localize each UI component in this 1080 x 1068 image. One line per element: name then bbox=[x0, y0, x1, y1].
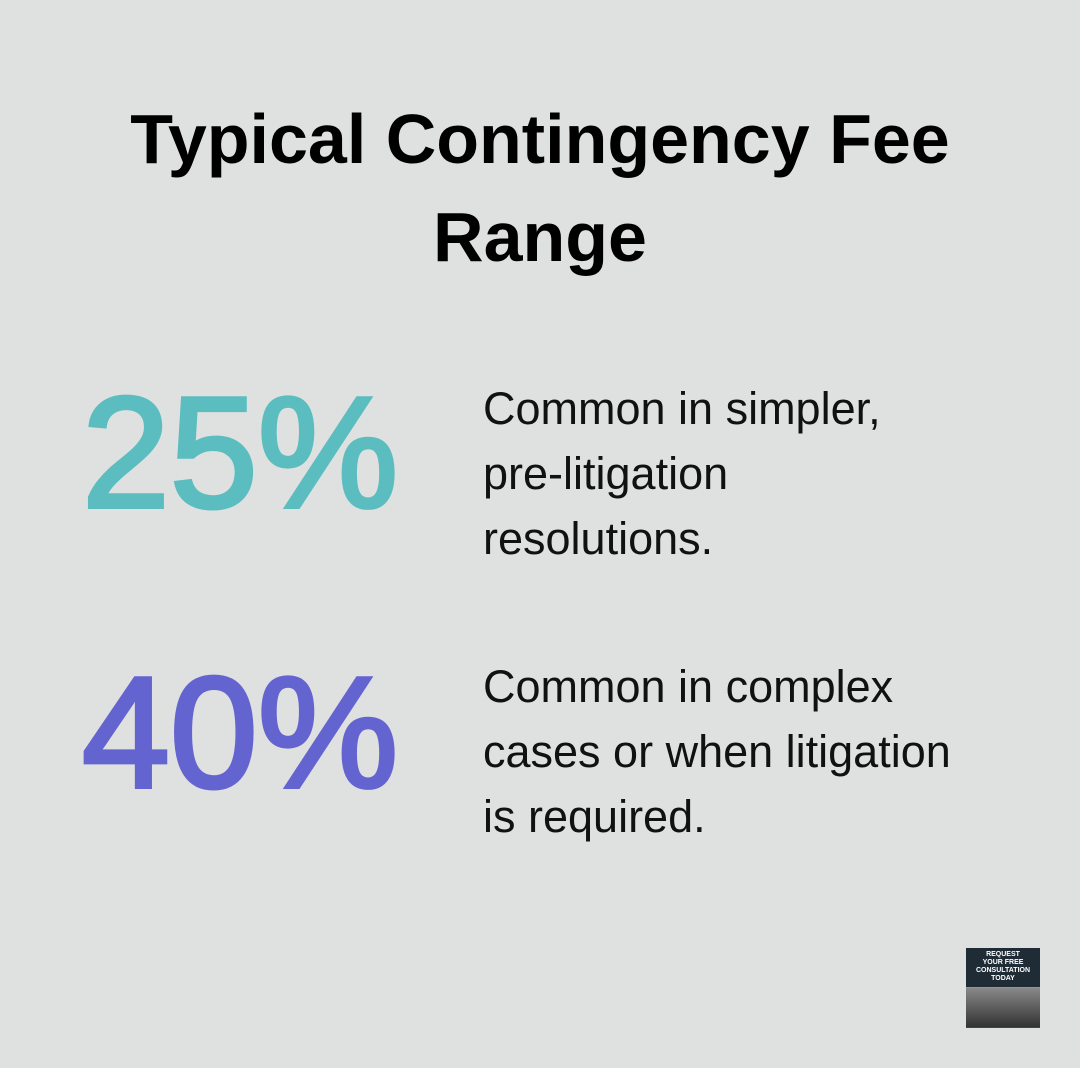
stat: 40%: 40% bbox=[82, 645, 398, 821]
stat: 25%: 25% bbox=[82, 365, 398, 541]
text: 40% description: is required. bbox=[483, 791, 706, 842]
title bbox=[130, 100, 950, 276]
text: 25% description: pre-litigation bbox=[483, 448, 728, 499]
text: 40% description bbox=[483, 661, 951, 842]
logo: consultation badge: YOUR FREE bbox=[983, 959, 1023, 966]
logo: consultation badge: CONSULTATION bbox=[976, 967, 1030, 974]
text: 40% description: cases or when litigation bbox=[483, 726, 951, 777]
logo: consultation badge: TODAY bbox=[991, 975, 1015, 982]
text: 25% description bbox=[483, 383, 881, 564]
text: 40% description: Common in complex bbox=[483, 661, 893, 712]
logo: consultation badge: REQUEST bbox=[986, 951, 1020, 958]
logo: consultation badge bbox=[966, 948, 1040, 1028]
text: 25% description: Common in simpler, bbox=[483, 383, 881, 434]
title: Range bbox=[433, 198, 647, 276]
text: 25% description: resolutions. bbox=[483, 513, 713, 564]
title: Typical Contingency Fee bbox=[130, 100, 950, 178]
